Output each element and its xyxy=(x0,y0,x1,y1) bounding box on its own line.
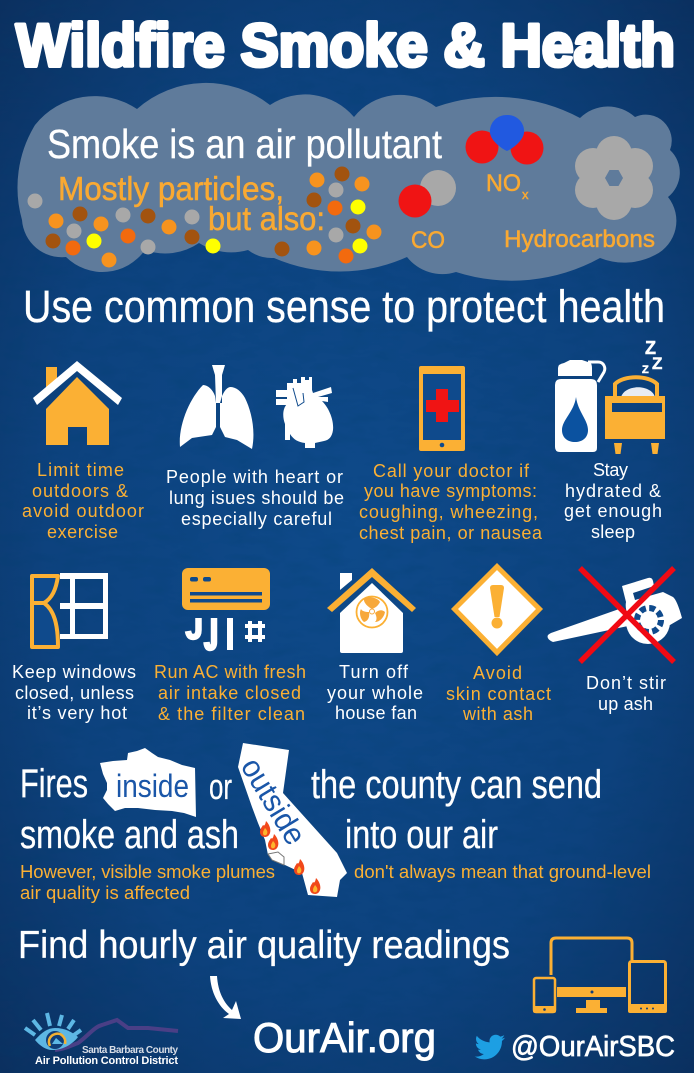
icon: zzz: Z xyxy=(642,364,649,376)
particles xyxy=(28,166,382,268)
icon: house with fan xyxy=(327,568,416,653)
caption: Keep windows xyxy=(12,662,136,682)
text: into our air: into our air xyxy=(345,813,498,857)
caption: especially careful xyxy=(181,509,332,529)
cloud shape xyxy=(17,83,680,281)
caption xyxy=(564,460,662,542)
icon: air conditioner xyxy=(182,568,270,650)
heading: smoke is an air pollutant: Smoke is an air pollutant xyxy=(47,121,443,167)
icon: county map with inside: inside xyxy=(116,768,189,804)
caption: with ash xyxy=(462,704,533,724)
logo text: district: Air Pollution Control District xyxy=(35,1055,178,1067)
caption: hydrated & xyxy=(565,481,661,501)
label: NOx: x xyxy=(522,187,529,202)
caption: People with heart or xyxy=(166,467,343,487)
icon: bed xyxy=(605,377,665,454)
title: Wildfire Smoke & Health xyxy=(16,12,675,79)
caption: lung isues should be xyxy=(169,488,344,508)
caption: air intake closed xyxy=(158,683,301,703)
arrow xyxy=(210,976,241,1019)
caption: exercise xyxy=(47,522,118,542)
caption: your whole xyxy=(327,683,423,703)
caption: Don’t stir xyxy=(586,673,666,693)
tip: run AC xyxy=(154,568,306,724)
caption: avoid outdoor xyxy=(22,501,144,521)
text: or: or xyxy=(209,766,232,807)
link: OurAir.org: OurAir.org xyxy=(253,1014,436,1061)
caption: Turn off xyxy=(339,662,409,682)
caption: it’s very hot xyxy=(27,703,127,723)
icon: twitter bird xyxy=(475,1035,505,1059)
caption: closed, unless xyxy=(15,683,134,703)
label: NOx: NO xyxy=(486,170,521,197)
caption: & the filter clean xyxy=(158,704,305,724)
tip: heart or lung issues xyxy=(166,365,344,529)
icon: California map with outside and fires xyxy=(234,743,347,897)
caption: sleep xyxy=(591,522,635,542)
text: mostly particles: Mostly particles, xyxy=(58,170,284,207)
icon: heart xyxy=(276,377,333,448)
caption: Avoid xyxy=(473,663,522,683)
caption: you have symptoms: xyxy=(364,481,537,501)
caption xyxy=(22,460,144,542)
tip: hydrate and sleep xyxy=(555,338,665,542)
caption: Call your doctor if xyxy=(373,461,530,481)
icon: county map with inside xyxy=(100,748,196,817)
icon: window with curtain xyxy=(32,573,108,647)
text: but also: but also: xyxy=(208,200,325,237)
text: fires: Fires xyxy=(20,762,88,806)
icon: leaf blower crossed out xyxy=(548,568,682,662)
icon: NOx molecule xyxy=(466,115,544,164)
icon: phone with red cross xyxy=(419,366,465,451)
icons: flames xyxy=(260,821,320,894)
icon: water bottle xyxy=(555,360,605,452)
tip: keep windows closed xyxy=(12,573,136,723)
logo text: Santa Barbara County xyxy=(82,1045,178,1056)
text: smoke and ash: smoke and ash xyxy=(20,813,239,857)
caption: Limit time xyxy=(37,460,124,480)
tip: call your doctor xyxy=(359,366,543,543)
text: the county can send: the county can send xyxy=(311,763,602,807)
icon: lungs xyxy=(180,365,253,449)
logo: Santa Barbara County APCD xyxy=(25,1013,178,1067)
caption xyxy=(359,461,543,543)
tip: turn off whole house fan xyxy=(327,568,423,723)
caption: coughing, wheezing, xyxy=(359,502,538,522)
tip: avoid skin contact xyxy=(446,566,551,724)
caption: outdoors & xyxy=(32,481,128,501)
text: air quality is affected: air quality is affected xyxy=(20,882,190,903)
icon: zzz: Z xyxy=(645,338,656,358)
icon: CO molecule xyxy=(398,170,456,218)
icon: California map with outside and fires: outside xyxy=(234,751,313,851)
panel: smoke cloud xyxy=(17,83,680,281)
icon: zzz: Z xyxy=(652,354,662,373)
icon: house xyxy=(33,361,122,445)
caption: chest pain, or nausea xyxy=(359,523,543,543)
caption: Stay xyxy=(593,460,628,480)
label: hydrocarbons: Hydrocarbons xyxy=(504,226,655,253)
caption xyxy=(586,673,666,714)
icon: warning diamond xyxy=(454,566,540,652)
caption: skin contact xyxy=(446,684,551,704)
heading: find hourly readings: Find hourly air quality readings xyxy=(18,924,510,967)
icon: zzz xyxy=(642,338,662,376)
caption xyxy=(446,663,551,724)
text: don't always mean: don't always mean that ground-level xyxy=(354,861,651,882)
text: twitter handle: @OurAirSBC xyxy=(511,1031,675,1063)
caption xyxy=(327,662,423,723)
caption xyxy=(154,662,306,724)
caption xyxy=(12,662,136,723)
icon: devices xyxy=(533,938,667,1013)
caption: house fan xyxy=(335,703,417,723)
sun and mountains xyxy=(25,1013,178,1050)
caption: get enough xyxy=(564,501,662,521)
tip: don't stir up ash xyxy=(548,568,682,714)
tip: limit time outdoors xyxy=(22,361,144,542)
text: however: However, visible smoke plumes xyxy=(20,861,275,882)
caption: Run AC with fresh xyxy=(154,662,306,682)
label: CO: CO xyxy=(411,227,445,254)
icon: hydrocarbon ring xyxy=(575,136,653,220)
caption: up ash xyxy=(598,694,653,714)
caption xyxy=(166,467,344,529)
